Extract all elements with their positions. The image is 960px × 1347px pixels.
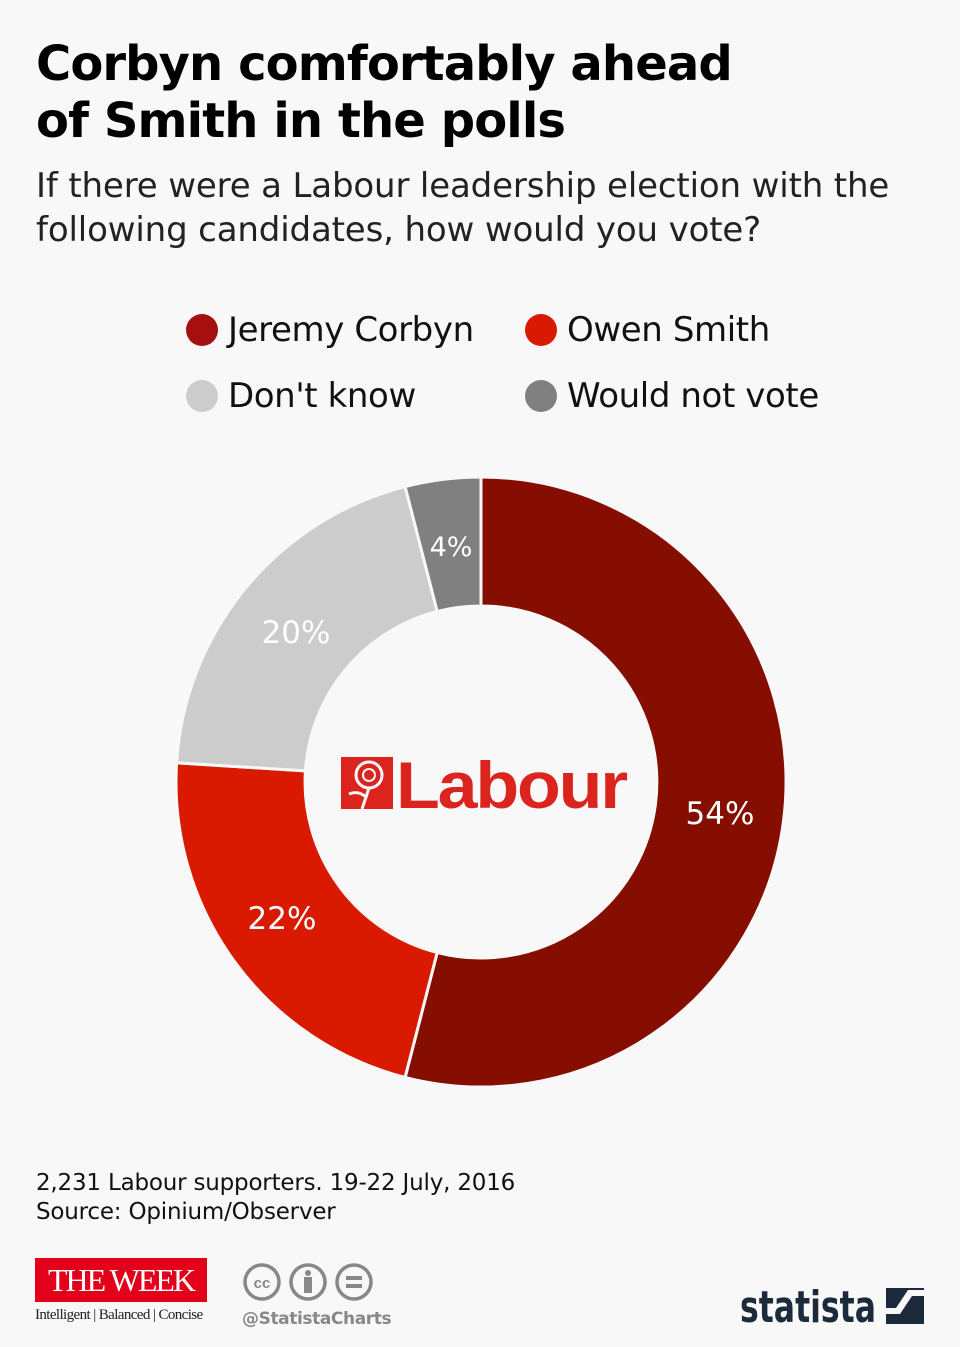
source note: Source: Opinium/Observer — [36, 1199, 336, 1225]
slice labels: 22% — [248, 901, 316, 937]
slice: Would not vote 4% — [405, 477, 481, 612]
legend: Jeremy Corbyn: Jeremy Corbyn — [228, 310, 474, 350]
slice labels — [248, 532, 754, 937]
logo: The Week: Intelligent | Balanced | Concise — [35, 1307, 203, 1323]
source note: 2,231 Labour supporters. 19-22 July, 2016 — [36, 1170, 515, 1196]
icons: creative commons — [242, 1263, 391, 1329]
title: of Smith in the polls — [36, 93, 565, 149]
source note — [36, 1170, 515, 1225]
slice: Owen Smith 22% — [176, 763, 437, 1077]
logo: The Week: THE WEEK — [48, 1262, 194, 1298]
legend: Would not vote: Would not vote — [567, 376, 819, 416]
slice: Jeremy Corbyn 54% — [405, 477, 786, 1087]
icons: creative commons: cc — [254, 1275, 270, 1292]
title: Corbyn comfortably ahead — [36, 36, 732, 92]
logo: The Week — [35, 1258, 207, 1323]
Labour logo: Labour — [396, 748, 627, 822]
subtitle: If there were a Labour leadership election with the following candidates, how would you vote? — [36, 166, 889, 250]
slice labels: 54% — [686, 796, 754, 832]
title — [36, 36, 732, 149]
slice: Don't know 20% — [177, 487, 437, 771]
icons: creative commons: @StatistaCharts — [242, 1309, 391, 1329]
slice labels: 20% — [262, 615, 330, 651]
legend — [186, 310, 819, 416]
legend: Don't know: Don't know — [228, 376, 416, 416]
slice labels: 4% — [430, 532, 472, 563]
legend: Owen Smith: Owen Smith — [567, 310, 770, 350]
